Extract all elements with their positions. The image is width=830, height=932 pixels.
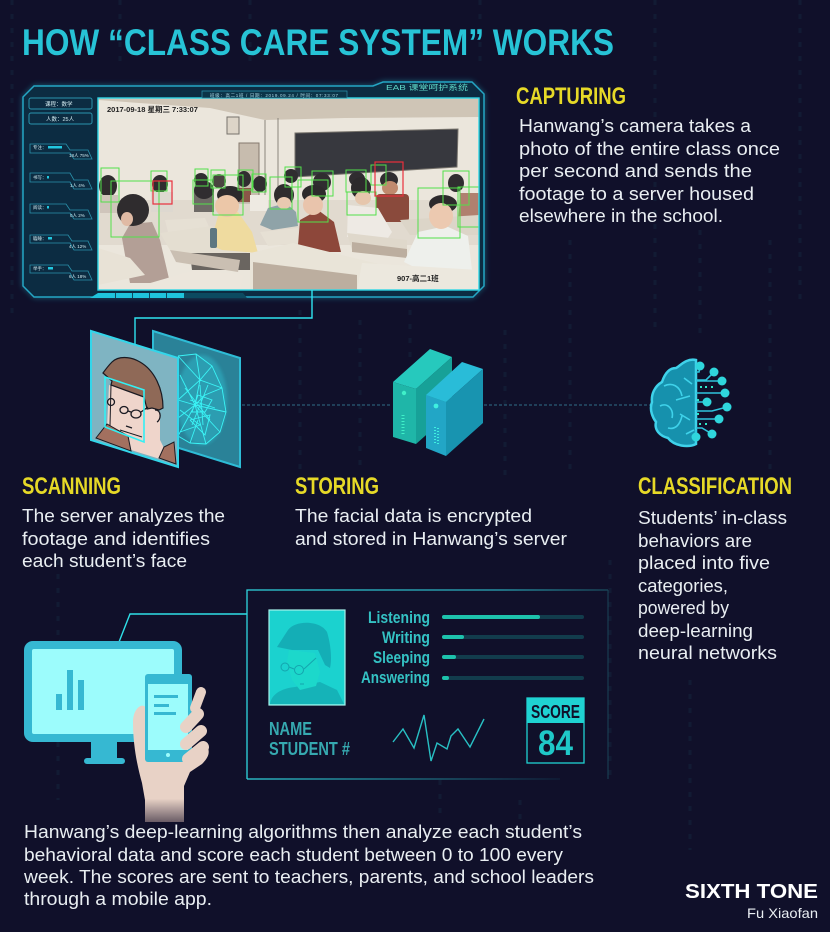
section: capturing — [516, 83, 780, 226]
icon: servers — [393, 349, 483, 456]
icon: monitor — [24, 641, 182, 764]
text: classification: behaviors are — [638, 530, 752, 551]
text: classification: deep-learning — [638, 620, 753, 641]
bar chart: behaviors: Listening — [368, 609, 430, 627]
photo date stamp: 2017-09-18 星期三 7:33:07 — [107, 104, 198, 114]
icon: brain — [651, 360, 732, 446]
student name labels: NAME — [269, 719, 312, 739]
class label: 907-高二1班 — [397, 273, 439, 283]
dotted connector — [242, 404, 650, 406]
text: storing — [295, 505, 567, 549]
sidebar stats: 6人 18% — [69, 274, 86, 279]
sidebar stats: 人数：25人 — [46, 115, 75, 123]
heading: scanning: SCANNING — [22, 473, 121, 500]
text: scanning: The server analyzes the — [22, 505, 225, 526]
text: classification: categories, — [638, 575, 728, 596]
section: classification — [638, 473, 792, 663]
credit: logo and author: Fu Xiaofan — [747, 905, 818, 921]
sidebar stats: 举手： — [33, 265, 46, 272]
sidebar stats — [29, 98, 92, 280]
sidebar stats: 1人 4% — [70, 183, 85, 188]
text: capturing: Hanwang’s camera takes a — [519, 115, 752, 136]
text: scanning — [22, 505, 225, 571]
title: HOW “CLASS CARE SYSTEM” WORKS — [22, 22, 614, 63]
heading: capturing: CAPTURING — [516, 83, 626, 110]
line chart: weekly trend — [393, 715, 484, 761]
text: capturing — [519, 115, 780, 226]
bar chart: behaviors: Sleeping — [373, 649, 430, 667]
score box — [527, 698, 584, 763]
text: scoring description: through a mobile app. — [24, 888, 212, 909]
credit: logo and author: SIXTH TONE — [685, 881, 818, 903]
icon: face scan — [91, 331, 240, 467]
sidebar stats: 阅读： — [33, 204, 46, 211]
text: classification — [638, 507, 787, 663]
back row students — [99, 169, 479, 227]
sidebar stats: 4人 12% — [69, 244, 86, 249]
text: capturing: per second and sends the — [519, 160, 752, 181]
text: capturing: footage to a server housed — [519, 183, 754, 204]
text: scanning: each student’s face — [22, 550, 187, 571]
text: classification: Students’ in-class — [638, 507, 787, 528]
portrait skin — [107, 385, 164, 459]
sidebar stats: 课程：数学 — [45, 100, 73, 108]
student name labels — [269, 719, 350, 759]
middle row students — [260, 177, 392, 238]
sidebar stats: 0人 2% — [70, 213, 85, 218]
sidebar stats: 18人 75% — [69, 153, 89, 158]
front row students — [117, 185, 472, 283]
text: capturing: photo of the entire class once — [519, 138, 780, 159]
text: storing: The facial data is encrypted — [295, 505, 532, 526]
panel: student report card — [247, 590, 608, 779]
bar chart: behaviors: Writing — [382, 629, 430, 647]
text: classification: powered by — [638, 597, 730, 618]
face detection boxes — [101, 165, 479, 238]
progress strip — [90, 293, 247, 298]
panel: capturing screen — [22, 81, 485, 298]
score box: 84 — [538, 724, 573, 763]
score box: SCORE — [531, 702, 580, 722]
connector: screen to scanning — [135, 290, 312, 346]
classroom photo — [98, 98, 479, 290]
bar chart: behaviors: Answering — [361, 669, 430, 687]
text: scoring description — [23, 821, 594, 909]
bar chart: behaviors — [361, 609, 584, 687]
system name tab: EAB 课堂呵护系统 — [386, 82, 469, 92]
portrait — [269, 610, 345, 705]
student name labels: STUDENT # — [269, 739, 350, 759]
top status bar: 班级：高二1班 / 日期：2019.09.24 / 时间：07:33:07 — [210, 92, 338, 99]
section: scanning — [22, 473, 225, 571]
heading: storing: STORING — [295, 473, 379, 500]
icon: hand with phone — [133, 674, 209, 822]
sidebar stats: 瞌睡： — [33, 235, 46, 241]
text: scanning: footage and identifies — [22, 528, 210, 549]
text: storing: and stored in Hanwang’s server — [295, 528, 567, 549]
top status bar — [202, 91, 347, 99]
text: scoring description: behavioral data and score each student between 0 to 100 every — [24, 844, 564, 865]
sidebar stats: 专注： — [33, 144, 46, 151]
text: classification: neural networks — [638, 642, 777, 663]
text: scoring description: Hanwang’s deep-learning algorithms then analyze each student’s — [24, 821, 582, 842]
text: classification: placed into five — [638, 552, 770, 573]
sidebar stats: 书写： — [33, 174, 46, 181]
connector: monitor to card — [119, 614, 247, 642]
credit: logo and author — [685, 881, 818, 921]
section: storing — [295, 473, 567, 549]
text: scoring description: week. The scores are sent to teachers, parents, and school leaders — [23, 866, 594, 887]
text: capturing: elsewhere in the school. — [519, 205, 723, 226]
